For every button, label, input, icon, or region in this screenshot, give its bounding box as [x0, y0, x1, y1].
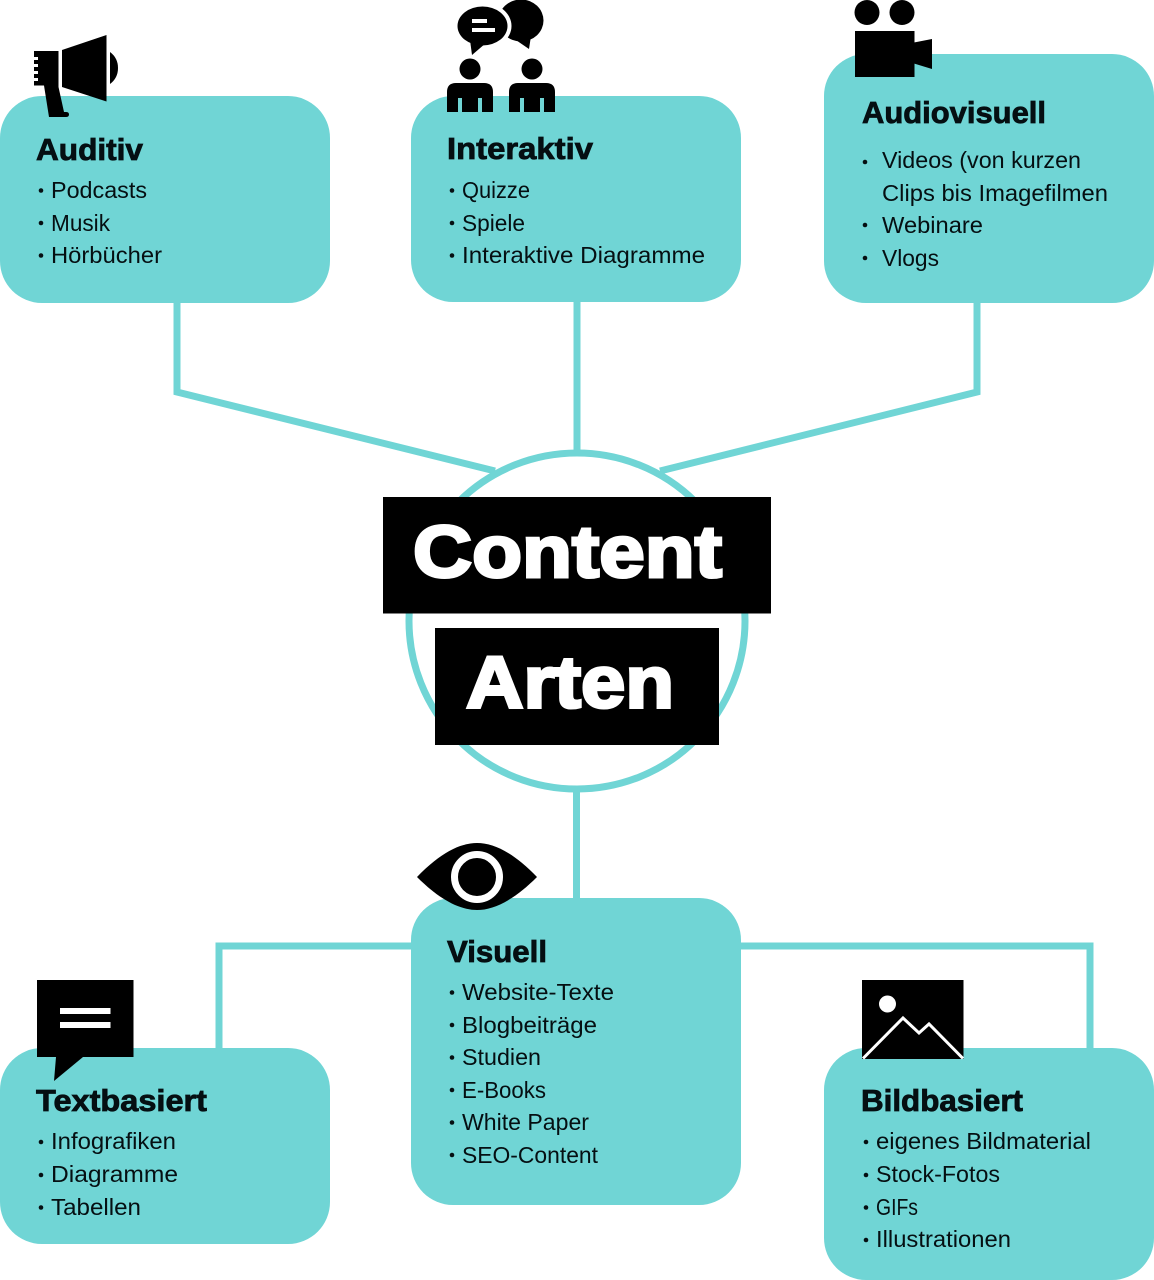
panel: Visuell: Visuell — [447, 935, 547, 969]
icon: megaphone — [34, 35, 118, 117]
panel: Bildbasiert — [824, 1048, 1154, 1280]
panel: Bildbasiert: GIFs — [876, 1194, 918, 1220]
icon: two people talking — [447, 0, 555, 112]
panel: Audiovisuell — [824, 54, 1154, 303]
title: Content: Content — [413, 512, 722, 593]
title: Arten — [435, 628, 719, 745]
connector: Audiovisuell to centre — [660, 303, 977, 471]
icon: speech bubble — [37, 980, 134, 1081]
panel: Bildbasiert: Bildbasiert — [861, 1084, 1023, 1118]
connector: Auditiv to centre — [177, 303, 495, 471]
panel: Audiovisuell: Webinare — [882, 212, 983, 238]
panel: Auditiv: Auditiv — [36, 133, 143, 167]
connector: Interaktiv to centre — [574, 302, 580, 452]
icon: image placeholder — [862, 980, 964, 1059]
icon: eye — [417, 843, 537, 910]
panel: Bildbasiert: Stock-Fotos — [876, 1161, 1000, 1187]
panel: Bildbasiert: eigenes Bildmaterial — [876, 1128, 1091, 1154]
panel: Auditiv — [0, 96, 330, 303]
panel: Auditiv: Podcasts — [51, 177, 147, 203]
title: Arten: Arten — [466, 642, 674, 724]
connector: Visuell to Textbasiert — [219, 946, 411, 1048]
panel: Interaktiv: Interaktive Diagramme — [462, 242, 705, 268]
panel: Textbasiert: Infografiken — [51, 1128, 176, 1154]
panel: Visuell: White Paper — [462, 1109, 589, 1135]
panel: Visuell: Studien — [462, 1044, 541, 1070]
panel: Textbasiert: Textbasiert — [36, 1084, 207, 1118]
central circle — [409, 453, 745, 789]
panel: Audiovisuell: Videos (von kurzen — [882, 147, 1081, 173]
panel: Audiovisuell: Audiovisuell — [862, 96, 1046, 130]
panel: Textbasiert: Diagramme — [51, 1161, 178, 1187]
icon: video camera — [854, 0, 932, 77]
panel: Interaktiv: Spiele — [462, 210, 525, 236]
panel: Textbasiert: Tabellen — [51, 1194, 141, 1220]
panel: Visuell: Website-Texte — [462, 979, 614, 1005]
panel: Interaktiv: Interaktiv — [447, 132, 593, 166]
panel: Interaktiv — [411, 96, 741, 302]
panel: Audiovisuell: Vlogs — [882, 245, 939, 271]
panel: Textbasiert — [0, 1048, 330, 1244]
panel: Auditiv: Hörbücher — [51, 242, 162, 268]
connector: Visuell to Bildbasiert — [741, 946, 1090, 1048]
panel: Visuell: E-Books — [462, 1077, 546, 1103]
panel: Visuell: Blogbeiträge — [462, 1012, 597, 1038]
panel: Audiovisuell: Clips bis Imagefilmen — [882, 180, 1108, 206]
title: Content — [383, 497, 771, 614]
panel: Visuell — [411, 898, 741, 1205]
panel: Visuell: SEO-Content — [462, 1142, 599, 1168]
panel: Auditiv: Musik — [51, 210, 110, 236]
connector: centre to Visuell — [573, 790, 580, 898]
panel: Interaktiv: Quizze — [462, 177, 530, 203]
panel: Bildbasiert: Illustrationen — [876, 1226, 1011, 1252]
